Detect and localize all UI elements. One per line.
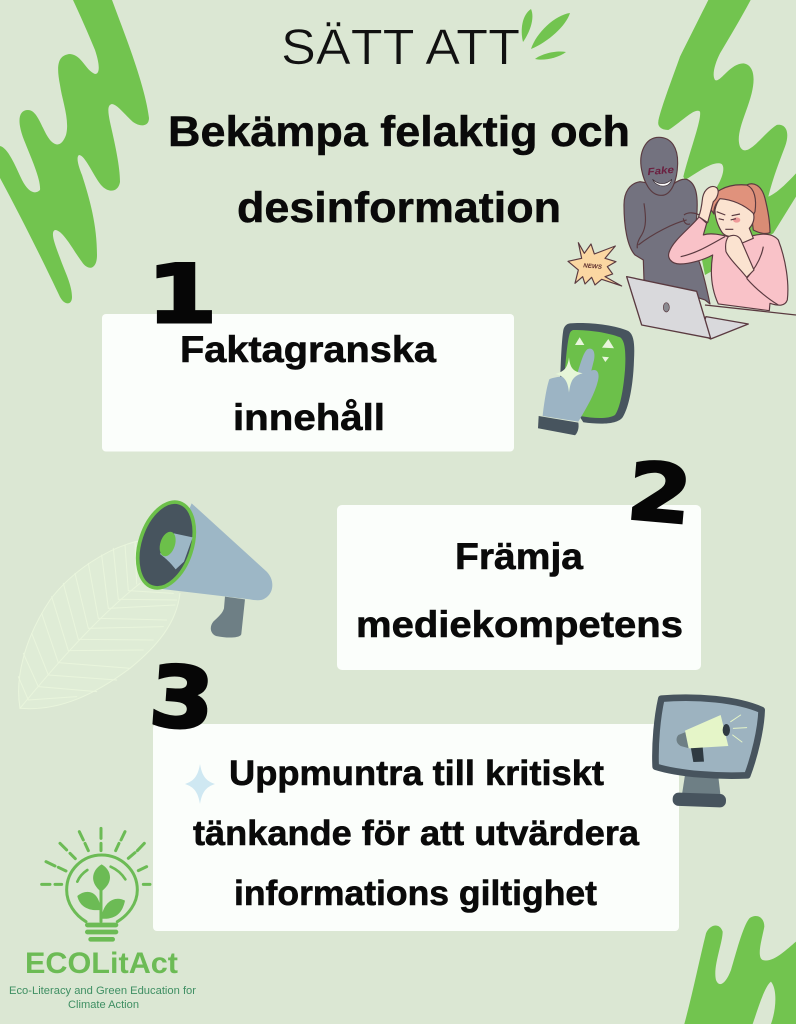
card 1 text: Faktagranska	[180, 329, 436, 370]
card 2 text: mediekompetens	[356, 604, 683, 645]
logo leaves	[77, 864, 125, 919]
fake label on mask: Fake	[647, 165, 675, 178]
tablet frame	[560, 323, 634, 424]
card 1 text: innehåll	[233, 397, 385, 438]
logo tagline	[9, 985, 196, 1011]
illustration: fake news man and worried woman at laptop	[568, 137, 796, 339]
megaphone handle	[211, 597, 245, 638]
card 3	[153, 724, 679, 931]
card 2 text	[356, 536, 683, 645]
laptop logo	[663, 303, 669, 312]
number 1: 1	[147, 248, 217, 341]
woman blush	[733, 217, 740, 223]
heading: Bekämpa felaktig och	[168, 108, 630, 156]
icon: sparkle	[185, 764, 215, 804]
logo tagline: Eco-Literacy and Green Education for	[9, 985, 196, 997]
icon: monitor with megaphone	[655, 698, 762, 808]
monitor base	[672, 792, 726, 808]
logo tagline: Climate Action	[68, 999, 139, 1011]
mini megaphone front	[723, 724, 730, 736]
sparkle	[555, 357, 583, 393]
woman hair	[709, 185, 756, 215]
green blob: top right	[658, 0, 796, 275]
news label: NEWS	[583, 263, 602, 271]
megaphone cone	[157, 503, 272, 600]
logo screw base	[87, 925, 116, 939]
title: Sätt att: SÄTT ATT	[281, 19, 520, 75]
card 3 text: informations giltighet	[234, 874, 597, 913]
laptop base	[700, 317, 748, 339]
number 2: 2	[624, 444, 696, 543]
green blob: top left	[0, 0, 149, 303]
card 1 text	[180, 329, 436, 438]
woman sweater	[669, 217, 788, 311]
laptop lid	[627, 277, 711, 338]
heading	[168, 108, 630, 232]
man arm lines	[637, 203, 699, 248]
card 1	[102, 314, 514, 452]
woman face	[715, 199, 754, 244]
logo: EcoLitAct bulb	[42, 828, 150, 939]
logo plant stem	[96, 878, 105, 922]
card 3 text: Uppmuntra till kritiskt	[229, 754, 604, 793]
pointing hand	[543, 349, 599, 422]
tablet screen	[564, 330, 625, 418]
heading: desinformation	[237, 184, 561, 232]
woman facial features	[717, 212, 740, 229]
man smile	[653, 179, 672, 186]
card 2 text: Främja	[455, 536, 583, 577]
green blob: bottom right	[684, 916, 796, 1024]
logo rays	[42, 828, 150, 884]
faint leaf	[18, 540, 180, 709]
woman ponytail	[747, 184, 770, 233]
mini megaphone handle	[691, 747, 704, 762]
mini megaphone cone	[685, 715, 728, 748]
woman hand on chin	[726, 235, 754, 277]
number 3: 3	[146, 647, 217, 749]
card 2	[337, 505, 701, 670]
monitor screen	[655, 698, 762, 776]
man body	[624, 179, 710, 304]
icon: megaphone with leaf	[18, 495, 272, 709]
table line	[705, 305, 796, 315]
monitor stand	[682, 775, 721, 797]
cuff	[538, 416, 579, 435]
icon: title splash	[522, 9, 570, 60]
logo bulb outline	[67, 855, 137, 922]
icon: tablet with pointing hand	[538, 323, 634, 435]
sound rays	[731, 715, 747, 742]
logo inner highlights	[77, 867, 125, 882]
logo wordmark: ECOLitAct	[25, 947, 178, 980]
megaphone green centre	[157, 530, 179, 558]
woman hand on head	[699, 186, 718, 223]
megaphone inner	[160, 533, 193, 569]
card 3 text: tänkande för att utvärdera	[193, 814, 640, 853]
mini megaphone back	[677, 732, 689, 748]
woman sleeve lines	[681, 237, 778, 305]
megaphone rim	[128, 495, 204, 595]
news burst	[568, 243, 622, 286]
card 3 text	[193, 754, 640, 913]
man head	[641, 137, 678, 195]
screen arrows	[575, 337, 614, 362]
